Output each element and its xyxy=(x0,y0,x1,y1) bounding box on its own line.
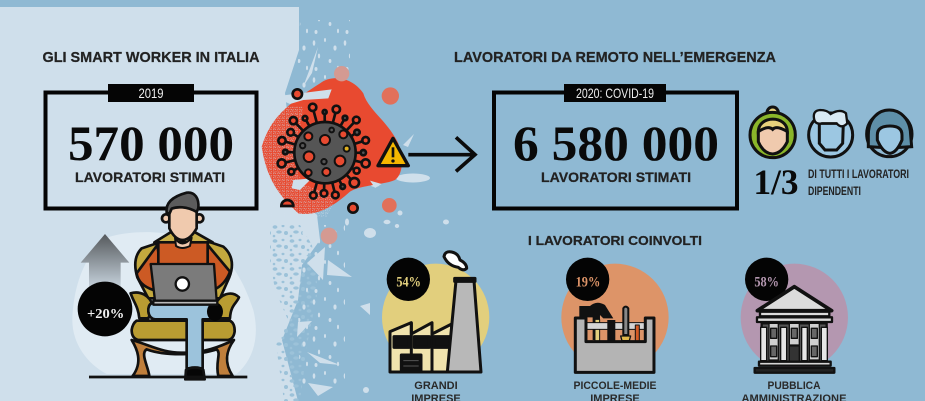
number: 570 000: 570 000 xyxy=(68,115,234,171)
icon: factory: 54% xyxy=(396,275,421,291)
armchair xyxy=(131,242,239,376)
growth arrow xyxy=(81,234,129,287)
floating dots xyxy=(321,66,399,244)
splash texture xyxy=(260,89,382,217)
laptop xyxy=(151,264,217,305)
badge: +20%: +20% xyxy=(87,307,124,322)
fraction: 1/3: 1/3 xyxy=(754,162,798,202)
number: 6 580 000: 6 580 000 xyxy=(513,115,719,171)
item: piccole-medie imprese xyxy=(561,258,669,401)
floor line xyxy=(89,373,247,381)
label: grandi imprese: GRANDI xyxy=(414,380,458,392)
person xyxy=(137,193,230,379)
label: piccole-medie imprese: PICCOLE-MEDIE xyxy=(574,380,656,392)
spikes xyxy=(282,107,366,195)
caption: di tutti i lavoratori dipendenti: DIPENDENTI xyxy=(808,186,861,198)
light blob xyxy=(72,232,256,374)
splatter fragments xyxy=(270,20,449,401)
label: grandi imprese xyxy=(411,380,461,401)
spike tips xyxy=(278,89,370,213)
icon: person with foam xyxy=(809,110,853,157)
red splash xyxy=(262,78,402,214)
icon: government building: 58% xyxy=(754,275,779,291)
label: pubblica amministrazione xyxy=(742,380,846,401)
virus body xyxy=(294,122,356,183)
icon: toolbox: 19% xyxy=(576,275,600,291)
label: lavoratori stimati: LAVORATORI STIMATI xyxy=(75,169,225,185)
item: grandi imprese xyxy=(382,252,489,401)
icon: person with dark hair xyxy=(867,110,912,157)
heading: gli smart worker: GLI SMART WORKER IN ITALIA xyxy=(42,49,260,66)
label: lavoratori stimati: LAVORATORI STIMATI xyxy=(541,169,691,185)
virus illustration xyxy=(260,66,475,244)
icon: toolbox xyxy=(561,258,669,372)
icon: woman with bun xyxy=(750,107,795,158)
badge: +20% xyxy=(78,282,132,336)
one third statistic xyxy=(750,107,912,158)
label: piccole-medie imprese xyxy=(574,380,656,401)
tab: 2019: 2019 xyxy=(138,85,164,101)
heading: lavoratori da remoto: LAVORATORI DA REMOTO NELL’EMERGENZA xyxy=(454,49,776,66)
icon: factory xyxy=(382,252,489,372)
label: pubblica amministrazione: PUBBLICA xyxy=(768,380,821,392)
tab: 2020 covid-19: 2020: COVID-19 xyxy=(576,85,654,101)
illustration: worker on armchair xyxy=(72,193,256,379)
body spots xyxy=(300,128,350,176)
warning triangle xyxy=(378,138,408,166)
item: pubblica amministrazione xyxy=(741,258,848,401)
stat box 2019 xyxy=(46,84,256,208)
icon: government building xyxy=(741,258,848,373)
stat box 2020 xyxy=(494,84,737,208)
tab: 2019 xyxy=(108,84,194,102)
caption: di tutti i lavoratori dipendenti xyxy=(808,169,909,198)
panel: left smart worker xyxy=(0,7,449,401)
arrow xyxy=(408,137,475,171)
heading: i lavoratori coinvolti: I LAVORATORI COINVOLTI xyxy=(528,233,702,248)
